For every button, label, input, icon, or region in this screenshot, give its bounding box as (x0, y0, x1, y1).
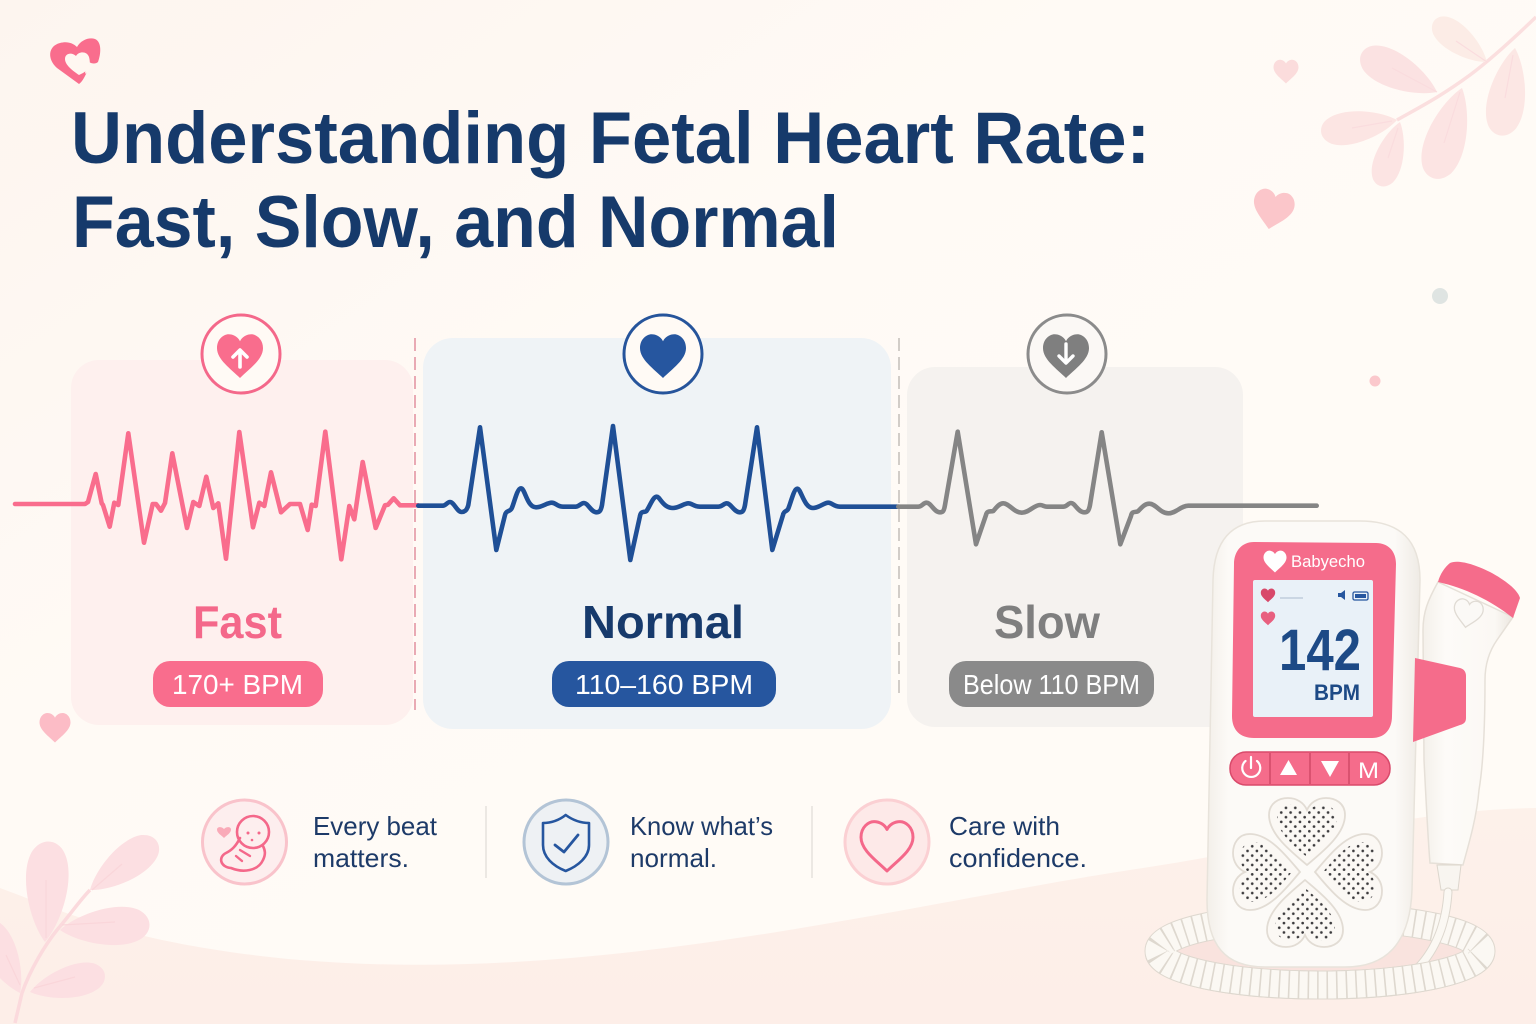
title: Understanding Fetal Heart Rate: (71, 98, 1150, 179)
panel: fast (71, 360, 413, 725)
text: every beat matters (313, 811, 438, 873)
brand logo (1264, 551, 1365, 572)
chart: normal heart rate trace (418, 426, 898, 560)
screen status icons (1261, 589, 1368, 625)
icon: shield check (524, 800, 608, 884)
background hill (0, 808, 1536, 1024)
probe handle (1418, 562, 1520, 968)
title (71, 98, 1150, 263)
control buttons: M (1358, 758, 1379, 783)
coiled cord (1159, 917, 1481, 985)
decorative dot pink (1370, 376, 1380, 386)
title: Fast, Slow, and Normal (72, 182, 839, 263)
text: know what's normal: Know what’s (630, 811, 773, 841)
reading: 142: 142 (1279, 618, 1361, 683)
decorative heart medium (1249, 187, 1297, 233)
chart: slow heart rate trace (898, 432, 1317, 544)
device body (1207, 521, 1420, 967)
coiled cord front (1145, 956, 1495, 976)
text: know what's normal: normal. (630, 843, 717, 873)
speaker grille: four hearts (1233, 798, 1382, 947)
badge: slow bpm: Below 110 BPM (963, 669, 1140, 700)
text: care with confidence (949, 811, 1087, 873)
text: care with confidence: Care with (949, 811, 1060, 841)
badge: slow bpm (949, 661, 1154, 707)
text: know what's normal (630, 811, 773, 873)
heading: slow: Slow (994, 596, 1100, 648)
panel: normal (423, 338, 891, 729)
icon: baby (202, 800, 286, 884)
control buttons (1230, 752, 1390, 785)
screen (1253, 580, 1373, 717)
display frame (1232, 542, 1396, 738)
icon: heart outline (845, 800, 929, 884)
decorative heart small (1274, 60, 1298, 84)
badge: fast bpm (153, 661, 323, 707)
text: care with confidence: confidence. (949, 843, 1087, 873)
brand logo: Babyecho (1291, 552, 1365, 571)
chart: fast heart rate trace (15, 432, 418, 559)
text: every beat matters: Every beat (313, 811, 438, 841)
decorative dot grey (1432, 288, 1448, 304)
badge: normal bpm (552, 661, 776, 707)
probe clip (1413, 658, 1466, 742)
icon: normal heart (624, 315, 702, 393)
logo heart (50, 38, 100, 84)
text: every beat matters: matters. (313, 843, 409, 873)
divider: fast and normal (414, 338, 416, 710)
decorative branch: bottom left (0, 826, 167, 1023)
heading: fast: Fast (193, 596, 282, 648)
icon: fast heart up (202, 315, 280, 393)
divider: normal and slow (898, 338, 900, 695)
decorative branch: top right (1318, 10, 1536, 190)
reading: BPM: BPM (1314, 680, 1360, 705)
device: fetal doppler (1159, 521, 1520, 985)
decorative heart left (40, 713, 70, 742)
badge: normal bpm: 110–160 BPM (575, 669, 753, 700)
panel: slow (907, 367, 1243, 727)
badge: fast bpm: 170+ BPM (172, 669, 303, 700)
icon: slow heart down (1028, 315, 1106, 393)
heading: normal: Normal (582, 596, 744, 648)
